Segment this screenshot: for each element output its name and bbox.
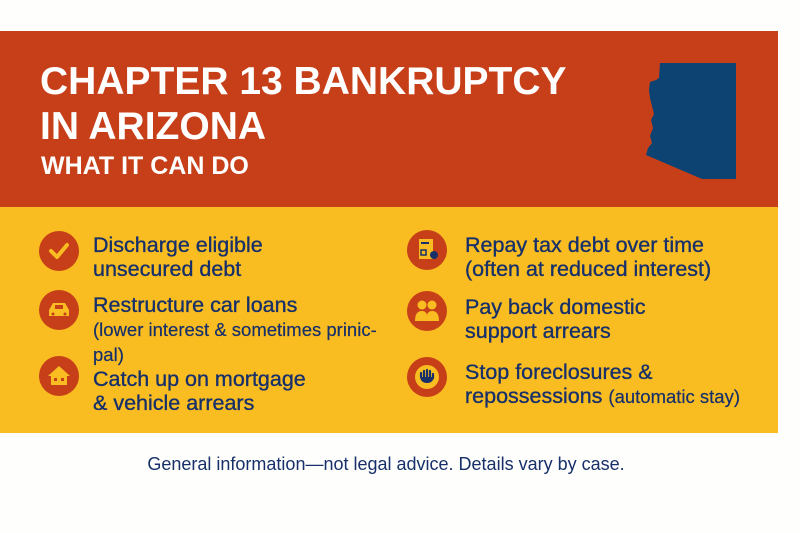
header band bbox=[0, 31, 778, 207]
text: discharge: unsecured debt bbox=[93, 257, 241, 281]
text: tax debt: (often at reduced interest) bbox=[465, 257, 711, 281]
text: domestic support bbox=[465, 295, 646, 343]
text: domestic support: support arrears bbox=[465, 319, 611, 343]
icon: people bbox=[407, 291, 447, 331]
text: tax debt bbox=[465, 233, 711, 281]
icon: arizona map bbox=[646, 63, 736, 179]
text: car loans bbox=[93, 293, 377, 366]
icon: check bbox=[39, 231, 79, 271]
text: mortgage: Catch up on mortgage bbox=[93, 367, 306, 391]
icon: car bbox=[39, 290, 79, 330]
text: domestic support: Pay back domestic bbox=[465, 295, 645, 319]
text: mortgage bbox=[93, 367, 306, 415]
text: tax debt: Repay tax debt over time bbox=[465, 233, 704, 257]
icon: stop hand bbox=[407, 357, 447, 397]
text: discharge: Discharge eligible bbox=[93, 233, 263, 257]
title bbox=[40, 60, 567, 148]
icon: house bbox=[39, 356, 79, 396]
text: car loans: pal) bbox=[93, 344, 124, 365]
text: stop foreclosures bbox=[465, 360, 740, 408]
title: CHAPTER 13 BANKRUPTCY bbox=[40, 60, 567, 103]
text: mortgage: & vehicle arrears bbox=[93, 391, 254, 415]
panel: benefits bbox=[0, 207, 778, 433]
subtitle: WHAT IT CAN DO bbox=[41, 152, 249, 180]
text: discharge bbox=[93, 233, 263, 281]
icon: tax document bbox=[407, 230, 447, 270]
text: car loans: (lower interest & sometimes prinic- bbox=[93, 319, 377, 340]
text: stop foreclosures: Stop foreclosures & bbox=[465, 360, 653, 384]
title: IN ARIZONA bbox=[40, 105, 266, 148]
footer disclaimer: General information—not legal advice. Details vary by case. bbox=[147, 454, 625, 474]
text: car loans: Restructure car loans bbox=[93, 293, 297, 317]
text: stop foreclosures: repossessions (automatic stay) bbox=[465, 384, 740, 408]
